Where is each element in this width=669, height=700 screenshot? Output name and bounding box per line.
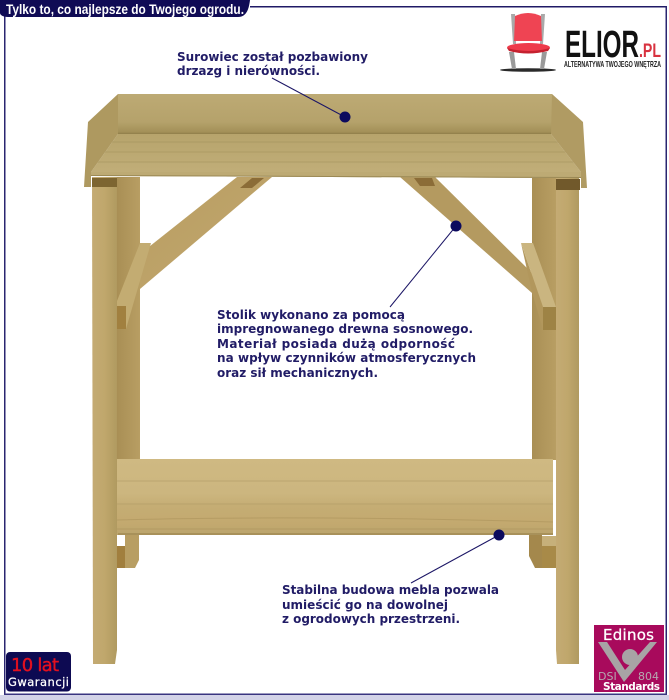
804: 804 (638, 670, 659, 683)
callout text: oraz sił mechanicznych. (217, 366, 378, 380)
leader line (390, 226, 456, 307)
back board (118, 94, 552, 134)
lower shelf (117, 459, 553, 535)
callout: top surface (177, 50, 368, 122)
DSI: DSI (598, 670, 617, 683)
leader line (272, 78, 345, 117)
logo: Elior.pl (500, 13, 661, 72)
callout text: z ogrodowych przestrzeni. (282, 612, 460, 626)
callout text (282, 583, 499, 626)
leader line (411, 535, 499, 583)
callout text: na wpływ czynników atmosferycznych (217, 351, 476, 365)
front right leg (556, 178, 579, 664)
right side board (551, 94, 587, 188)
brand: Edinos (603, 626, 654, 644)
label: Gwarancji (8, 675, 69, 689)
warranty badge (6, 652, 71, 692)
callout text: umieścić go na dowolnej (282, 598, 448, 612)
callout text: Stolik wykonano za pomocą (217, 308, 405, 322)
left side board (84, 94, 118, 187)
product: wooden garden table (84, 94, 587, 664)
standards: Standards (603, 681, 660, 693)
right cross piece (521, 243, 556, 330)
callout text: Stabilna budowa mebla pozwala (282, 583, 499, 597)
icon: V mark with circle (598, 642, 657, 682)
marker dot (340, 112, 350, 122)
marker dot (494, 530, 504, 540)
wordmark suffix: .PL (639, 41, 661, 62)
dark leg joints (92, 178, 580, 190)
callout text (217, 308, 476, 380)
left brace (140, 177, 272, 289)
left cross piece (115, 243, 151, 329)
icon: red chair (500, 13, 556, 72)
front left leg (92, 177, 117, 664)
Edinos DSI 804 badge (594, 625, 664, 693)
right brace (400, 177, 532, 293)
callout text (177, 50, 368, 78)
years: 10 lat (11, 655, 59, 676)
callout text: drzazg i nierówności. (177, 64, 320, 78)
callout text: impregnowanego drewna sosnowego. (217, 322, 473, 336)
lower cross pieces below the shelf (115, 535, 556, 568)
callout: material (217, 220, 476, 380)
back legs (117, 177, 556, 460)
callout text: Materiał posiada dużą odporność (217, 337, 455, 351)
callout text: Surowiec został pozbawiony (177, 50, 368, 64)
header banner: Tylko to, co najlepsze do Twojego ogrodu. (6, 2, 244, 17)
table top (91, 134, 581, 178)
callout: stability (282, 530, 504, 626)
marker dot (450, 220, 462, 232)
